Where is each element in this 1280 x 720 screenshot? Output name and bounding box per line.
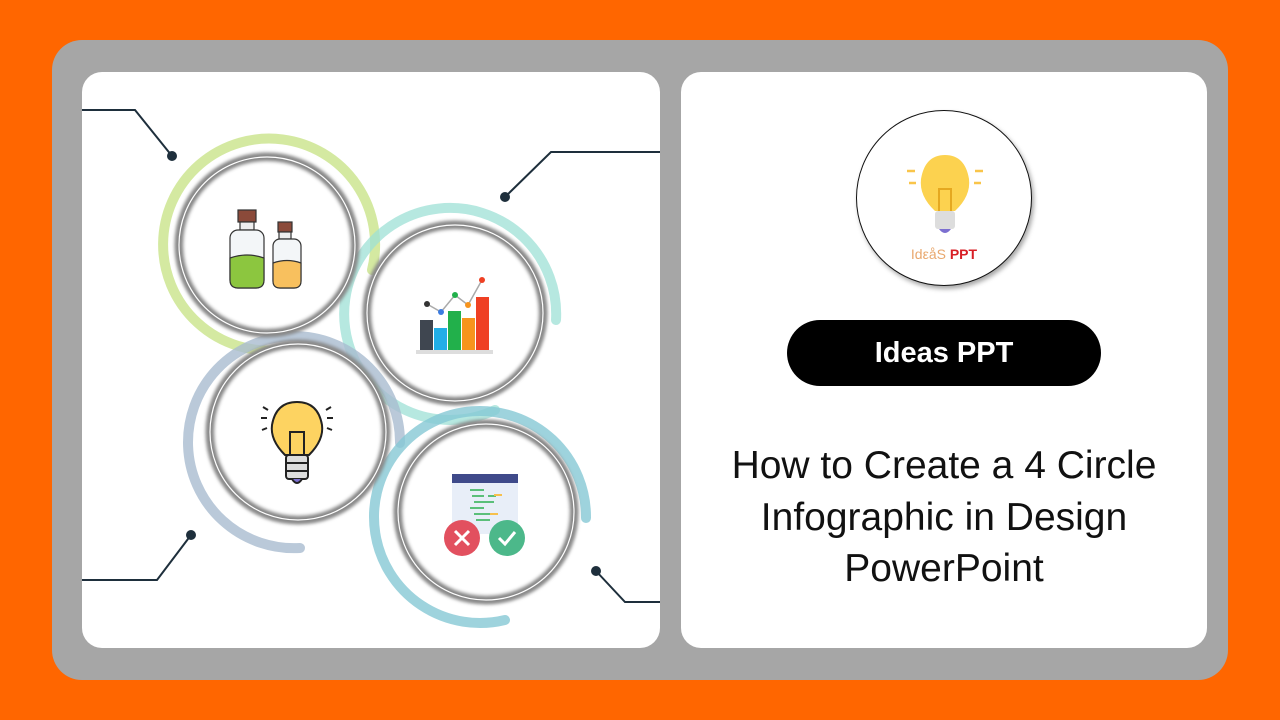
circle 4: code check xyxy=(398,424,574,600)
title text: How to Create a 4 Circle xyxy=(732,444,1156,487)
panel: right xyxy=(681,72,1207,648)
arc: blue teal xyxy=(374,411,586,623)
circle 1: bottles xyxy=(179,157,355,333)
arc: green xyxy=(163,139,375,351)
icon: logo bulb xyxy=(907,155,983,233)
icon: bottles xyxy=(230,210,301,288)
connector: top-right xyxy=(501,152,660,201)
icon: code window xyxy=(444,474,525,556)
icon: bar chart xyxy=(416,277,493,354)
circle 2: chart xyxy=(367,225,543,401)
connector: bottom-left xyxy=(82,531,195,580)
panel: left infographic xyxy=(82,72,660,648)
pill: Ideas PPT xyxy=(787,320,1101,386)
connector: bottom-right xyxy=(592,567,660,602)
icon: light bulb xyxy=(261,402,333,483)
title text: PowerPoint xyxy=(844,547,1044,590)
title text xyxy=(732,444,1156,590)
logo text: IdεåS PPT xyxy=(911,246,978,262)
arc: teal xyxy=(344,208,556,420)
arc: blue gray xyxy=(188,336,400,548)
title text: Infographic in Design xyxy=(761,496,1127,538)
connector: top-left xyxy=(82,110,176,160)
logo circle xyxy=(856,110,1032,286)
circle 3: bulb xyxy=(210,344,386,520)
pill: Ideas PPT: Ideas PPT xyxy=(875,337,1013,369)
